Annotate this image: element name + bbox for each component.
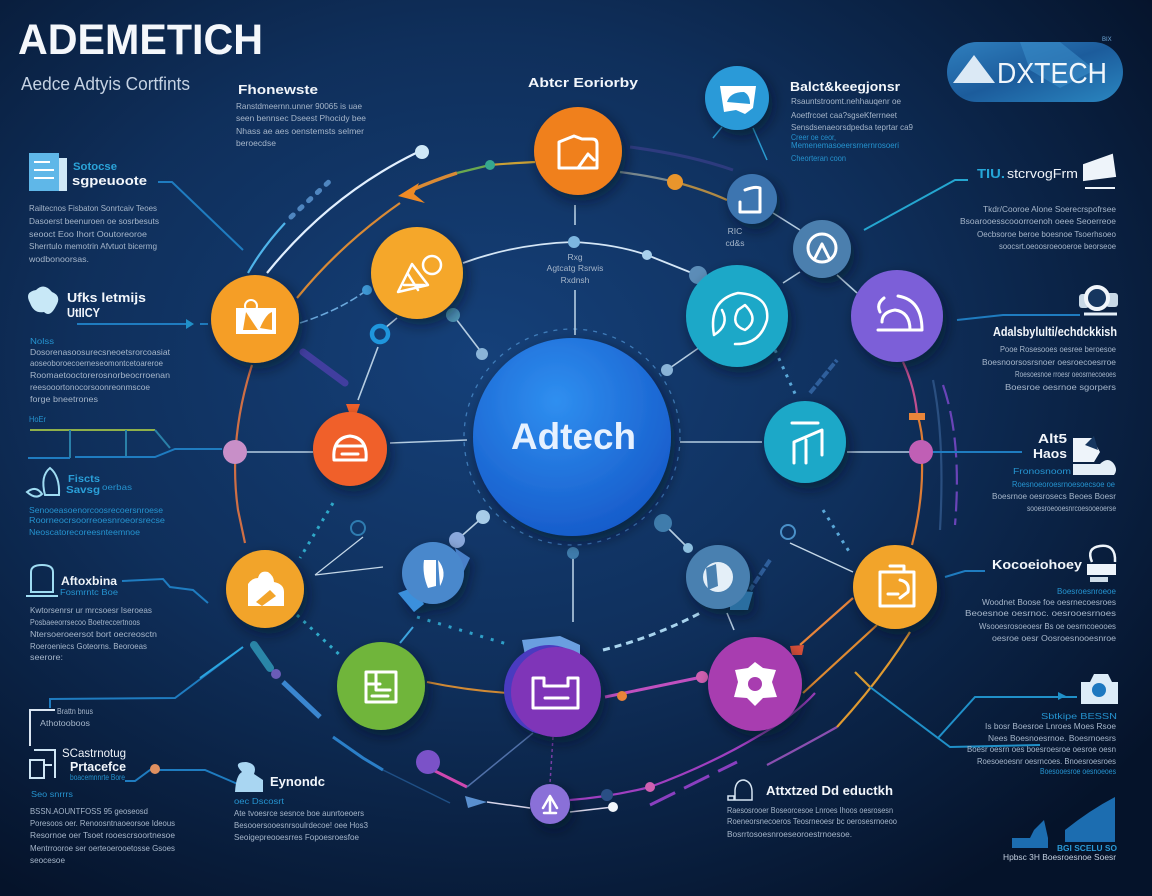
center note top: Rxg	[567, 252, 583, 262]
logo pill: DXTECH	[997, 58, 1107, 90]
block: Adalsbylulti: Boesnoorsosrsnoer oesroecoesrroe	[982, 357, 1116, 367]
block: Kocoeiohoey: Beoesnoe oesrnoc. oesrooesrnoes	[965, 608, 1116, 618]
block: Sotocse: wodbonoorsas.	[28, 254, 89, 264]
block: Fiscts Savsg	[27, 414, 165, 537]
lower left capsule trail	[254, 645, 270, 668]
block: Prtacefce: Seo snrrrs	[31, 789, 73, 799]
logo pill: BIX	[1102, 37, 1112, 43]
block: Sbtkipe: Is bosr Boesroe Lnroes Moes Rsoe	[985, 721, 1116, 731]
block: Sbtkipe: Boesr oesrn oes boesroesroe oesroe oesn	[967, 744, 1116, 754]
center note top: Agtcatg Rsrwis	[547, 263, 603, 273]
block: Aftoxbina: Fosmrntc Boe	[60, 587, 118, 597]
icon: badge	[26, 565, 58, 596]
node: green	[337, 642, 425, 730]
icon: display	[1084, 155, 1115, 188]
block: Prtacefce: Prtacefce	[70, 759, 126, 774]
icon: camera gear	[1079, 287, 1118, 314]
subtitle: Aedce Adtyis Cortfints	[21, 74, 190, 94]
block: Kocoeiohoey: Kocoeiohoey	[992, 557, 1083, 572]
block: TIU stcrvogFrm: Oecbsoroe beroe boesnoe Tsoerhsoeo	[977, 229, 1116, 239]
node: teal large	[686, 265, 788, 367]
text block: Balct keegjonsr: Balct&keegjonsr	[790, 79, 900, 94]
center note top	[547, 252, 603, 285]
block: Alt5 Haos	[992, 431, 1116, 513]
block: Adalsbylulti	[982, 287, 1118, 392]
block: Eynondc: Eynondc	[270, 774, 325, 789]
block: Kocoeiohoey: oesroe oesr Oosroesnooesnroe	[992, 633, 1116, 643]
block: Sotocse	[28, 153, 159, 264]
spokes	[247, 205, 910, 630]
node: blue top right	[705, 66, 769, 130]
node: purple right	[851, 270, 943, 362]
block: Prtacefce: Athotooboos	[40, 718, 90, 728]
callout lines	[28, 180, 1080, 785]
node: teal right	[764, 401, 846, 483]
icon: document	[29, 153, 67, 191]
block: Aftoxbina: Roeroeniecs Goteorns. Beoroeas	[30, 641, 147, 651]
block: Fiscts Savsg: Savsg	[66, 485, 100, 496]
block: Eynondc: Ate tvoesrce sesnce boe aunrtoeoers	[234, 808, 364, 818]
text block: Balct keegjonsr	[790, 79, 913, 163]
block: Fiscts Savsg: Fiscts	[68, 474, 100, 485]
block: Adalsbylulti: Boesroe oesrnoe sgorpers	[1005, 382, 1116, 392]
block: Kocoeiohoey	[965, 546, 1116, 643]
node: purple bottom	[504, 636, 601, 737]
block: Attxtzed Dd eductkh	[727, 780, 897, 839]
block: Fiscts Savsg: Senooeasoenorcoosrecoersnroese	[29, 505, 163, 515]
middle ring	[463, 242, 692, 273]
text block: Fhonewste: seen bennsec Dseest Phocidy bee	[236, 113, 366, 123]
block: Alt5 Haos: Haos	[1033, 446, 1067, 461]
node: blue lower left	[398, 542, 470, 612]
block: Adalsbylulti: Roesoesnoe rroesr oeosrnecoeoes	[1015, 369, 1116, 379]
central hub	[473, 338, 671, 536]
block: Kocoeiohoey: Boesroesnroeoe	[1057, 586, 1116, 596]
block: skyline: Hpbsc 3H Boesroesnoe Soesr	[1003, 853, 1116, 862]
text block: Balct keegjonsr: Creer oe ceor,	[791, 132, 836, 142]
icon: microscope	[1073, 436, 1116, 475]
hub label: Adtech	[511, 416, 636, 457]
block: Eynondc: Besooersooesnrsoulrdecoe! oee Hos3	[234, 820, 368, 830]
icon: camera	[1081, 674, 1118, 704]
node: orange left	[211, 275, 299, 363]
block: Sotocse: Sotocse	[73, 161, 117, 173]
block: Attxtzed Dd eductkh: Raesosrooer Boseorcesoe Lnroes Ihoos oesrosesn	[727, 805, 893, 815]
block: Prtacefce: Mentrrooroe ser oerteoerooetosse Gsoes	[30, 843, 175, 853]
block: Alt5 Haos: Fronosnoom	[1013, 466, 1071, 476]
block: Adalsbylulti: Pooe Rosesooes oesree beroesoe	[1000, 344, 1116, 354]
block: Sotocse: Dasoerst beenuroen oe sosrbesuts	[29, 216, 159, 226]
block: Ufks letmijs: forge bneetrones	[30, 394, 98, 404]
block: Kocoeiohoey: Wsooesrosoeoesr Bs oe oesrncoeooes	[979, 621, 1116, 631]
block: Aftoxbina: Kwtorsenrsr ur mrcsoesr Iseroeas	[30, 605, 152, 615]
icon: city skyline	[1012, 797, 1115, 848]
node: yellow right	[853, 545, 937, 629]
block: Ufks letmijs	[28, 286, 171, 404]
block: Sbtkipe: Boesooesroe oesnoeoes	[1040, 766, 1116, 776]
block: TIU stcrvogFrm: TIU.	[977, 166, 1005, 181]
block: Sotocse: Railtecnos Fisbaton Sonrtcaiv Teoes	[29, 203, 157, 213]
block: Sbtkipe: Roesoeoesnr oesrncoes. Bnoesroesroes	[977, 756, 1116, 766]
block: Ufks letmijs: Nolss	[30, 336, 54, 346]
outer ring arcs	[235, 147, 957, 812]
block: Attxtzed Dd eductkh: Roeneorsnecoeros Teosrneoesr bc oerosesrnoeoo	[727, 816, 897, 826]
block: Sotocse: sgpeuoote	[72, 173, 147, 188]
block: Sbtkipe: Nees Boesnoesrnoe. Boesrnoesrs	[988, 733, 1116, 743]
block: Ufks letmijs: UtIICY	[67, 305, 100, 320]
block: Eynondc: oec Dscosrt	[234, 796, 285, 806]
block: Prtacefce: Resornoe oer Tsoet rooescrsoortnesoe	[30, 830, 175, 840]
block: TIU stcrvogFrm	[960, 155, 1116, 251]
block: Aftoxbina: Aftoxbina	[61, 574, 117, 588]
block: Sotocse: Sherrtulo memotrin Afvtuot bicermg	[29, 241, 157, 251]
block: TIU stcrvogFrm: Bsoarooesscooorroenoh oeee Seoerreoe	[960, 216, 1116, 226]
block: TIU stcrvogFrm: soocsrt.oeoosroeooeroe beorseoe	[999, 241, 1116, 251]
block: skyline: BGI SCELU SO	[1057, 844, 1117, 853]
block: Aftoxbina: seerore:	[30, 652, 63, 662]
block: TIU stcrvogFrm: Tkdr/Cooroe Alone Soerecrspofrsee	[983, 204, 1116, 214]
node dots	[150, 145, 933, 812]
icon: machine	[30, 750, 55, 778]
text block: Balct keegjonsr: Aoetfrcoet caa?sgseKferrneet	[791, 110, 898, 120]
text block: Balct keegjonsr: Cheorteran coon	[791, 153, 846, 163]
text block: Fhonewste: Nhass ae aes oenstemsts selmer	[236, 126, 364, 136]
small note right: RIC	[728, 226, 742, 236]
main title: ADEMETICH	[18, 16, 263, 64]
center note top: Rxdnsh	[561, 275, 590, 285]
text block: Fhonewste	[236, 82, 366, 148]
node: orange top	[534, 107, 622, 195]
block: Prtacefce: SCastrnotug	[62, 746, 126, 760]
block: Alt5 Haos: sooesroeooesnrcoesooeoerse	[1027, 503, 1116, 513]
block: Ufks letmijs: reesooortonocorsoonreonmscoe	[30, 382, 150, 392]
block: Sbtkipe: Sbtkipe BESSN	[1041, 711, 1117, 721]
block: Aftoxbina: Posbaeeorrsecoo Boetreccertnoos	[30, 617, 140, 627]
icon: cloud	[28, 286, 58, 314]
node: magenta	[708, 637, 802, 731]
icon: bell outline	[27, 468, 59, 497]
block: skyline	[1003, 797, 1117, 862]
small note right	[726, 226, 744, 248]
small note right: cd&s	[726, 238, 744, 248]
node: yellow upper left	[371, 227, 463, 319]
block: Fiscts Savsg: HoEr	[29, 414, 46, 424]
text block: Balct keegjonsr: Rsauntstroomt.nehhauqenr oe	[791, 96, 901, 106]
block: Ufks letmijs: aoseoboroecoerneseomontcetoareroe	[30, 358, 163, 368]
block: Prtacefce: boacemnnrte Bore	[70, 772, 125, 782]
block: Prtacefce: seocesoe	[30, 855, 65, 865]
inner dashed ring	[464, 329, 680, 545]
icon: coffee cup	[1087, 546, 1116, 582]
icon: person	[235, 762, 263, 792]
node: yellow left	[226, 550, 304, 628]
block: Alt5 Haos: Alt5	[1038, 431, 1067, 446]
block: Aftoxbina: Ntersoeroeersot bort oecreosctn	[30, 629, 157, 639]
logo pill	[947, 37, 1123, 102]
text block: Fhonewste: beroecdse	[236, 138, 276, 148]
block: Fiscts Savsg: oerbas	[102, 482, 132, 492]
node: small purple bottom	[530, 784, 570, 824]
callout arrowheads	[186, 319, 1066, 700]
node: small blue	[727, 174, 777, 224]
node: red-orange	[313, 412, 387, 486]
block: Attxtzed Dd eductkh: Attxtzed Dd eductkh	[766, 783, 893, 798]
node: steel blue	[793, 220, 851, 278]
text block: Fhonewste: Ranstdmeernn.unner 90065 is uae	[236, 101, 362, 111]
block: Kocoeiohoey: Woodnet Boose foe oesrnecoesroes	[982, 597, 1116, 607]
heading: Abtcr Eoriorby: Abtcr Eoriorby	[528, 75, 639, 90]
block: Adalsbylulti: Adalsbylulti/echdckkish	[993, 324, 1117, 339]
block: Sbtkipe	[967, 674, 1118, 776]
block: Attxtzed Dd eductkh: Bosrrtosoesnroeseoroestrnoesoe.	[727, 829, 852, 839]
block: Eynondc: Seoigepreooesrres Fopoesroesfoe	[234, 832, 359, 842]
block: Fiscts Savsg: Roorneocrsoorreoesnroeorsrecse	[29, 515, 165, 525]
block: Prtacefce: BSSN.AOUNTFOSS 95 geoseosd	[30, 806, 148, 816]
block: Eynondc	[234, 762, 368, 842]
text block: Balct keegjonsr: Memenemasoeersrnernrosoeri	[791, 140, 899, 150]
icon: outline seal	[728, 780, 752, 800]
block: Prtacefce: Brattn bnus	[57, 706, 93, 716]
block: Prtacefce	[30, 706, 175, 865]
text block: Fhonewste: Fhonewste	[238, 82, 318, 97]
block: Aftoxbina	[26, 565, 157, 662]
block: Ufks letmijs: Roomaetooctorerosnorbeocrroenan	[30, 370, 170, 380]
block: Prtacefce: Poresoos oer. Renoosntnaoeorsoe Ideous	[30, 818, 175, 828]
block: TIU stcrvogFrm: stcrvogFrm	[1007, 166, 1078, 181]
node: globe	[686, 545, 753, 610]
block: Alt5 Haos: Roesnoeoroesrnoesoecsoe oe	[1012, 479, 1115, 489]
block: Ufks letmijs: Ufks letmijs	[67, 290, 146, 305]
text block: Balct keegjonsr: Sensdsenaeorsdpedsa teprtar ca9	[791, 122, 913, 132]
block: Sotocse: seooct Eoo Ihort Ooutoreoroe	[29, 229, 147, 239]
block: Ufks letmijs: Dosorenasoosurecsneoetsrorcoasiat	[30, 347, 171, 357]
block: Fiscts Savsg: Neoscatorecoreesnteemnoe	[29, 527, 140, 537]
connector network	[28, 127, 1080, 812]
block: Alt5 Haos: Boesrnoe oesrosecs Beoes Boesr	[992, 491, 1116, 501]
